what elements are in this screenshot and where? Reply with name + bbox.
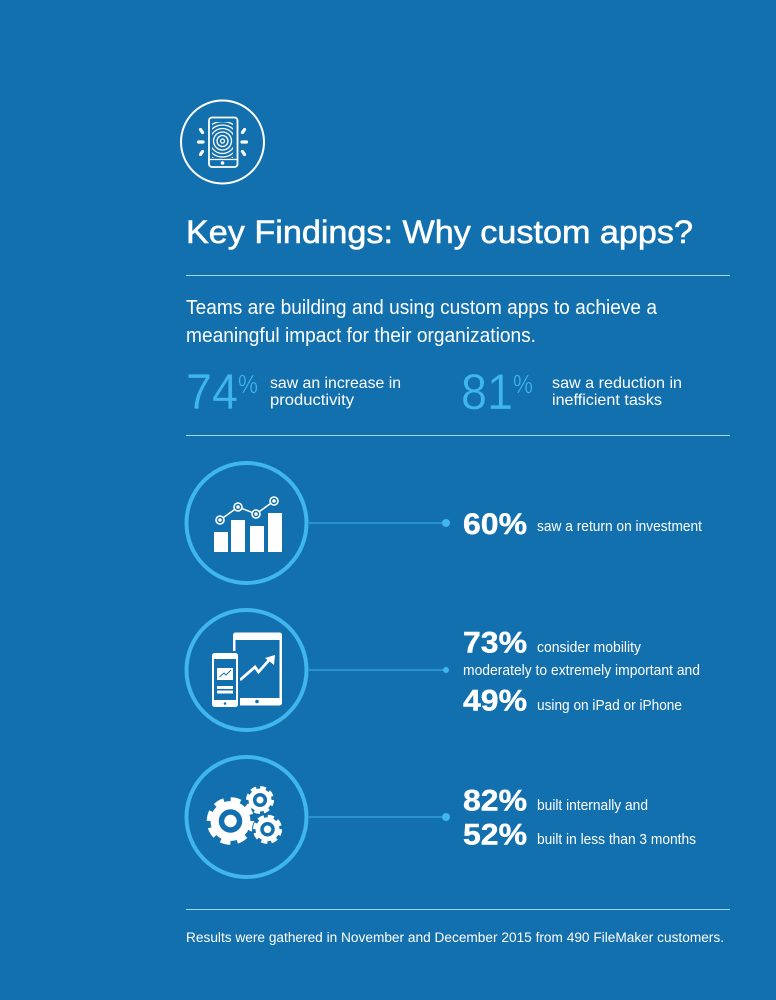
stat: 81% inefficient tasks: inefficient tasks	[552, 392, 662, 409]
stat: 73% and 49% mobility	[463, 626, 700, 718]
stat: 60% ROI: saw a return on investment	[537, 519, 702, 535]
intro text	[186, 297, 658, 347]
stat: 74% productivity: productivity	[270, 392, 354, 409]
stat: 81% inefficient tasks: saw a reduction in	[552, 375, 682, 392]
stat: 82% and 52% build: 52%	[463, 818, 527, 852]
stat: 74% productivity: 74	[186, 364, 238, 420]
stat: 73% and 49% mobility: 73%	[463, 626, 527, 660]
stat: 74% productivity: saw an increase in	[270, 375, 401, 392]
stat: 81% inefficient tasks: %	[513, 369, 533, 399]
footer note: Results were gathered in November and December 2015 from 490 FileMaker customers.	[186, 930, 724, 946]
stat: 73% and 49% mobility: using on iPad or iPhone	[537, 698, 682, 714]
stat: 82% and 52% build: built in less than 3 months	[537, 832, 696, 848]
stat: 60% ROI	[463, 508, 702, 541]
icon: phone with fingerprint	[181, 100, 264, 184]
connector: built internally	[309, 813, 450, 821]
intro text: Teams are building and using custom apps to achieve a	[186, 297, 658, 319]
stat: 73% and 49% mobility: moderately to extremely important and	[463, 663, 700, 679]
stat: 81% inefficient tasks: 81	[461, 364, 513, 420]
title: Key Findings: Why custom apps?	[186, 214, 693, 250]
stat: 73% and 49% mobility: 49%	[463, 684, 527, 718]
connector: return on investment	[309, 519, 450, 527]
stat: 82% and 52% build: 82%	[463, 784, 527, 818]
stat: 74% productivity: %	[238, 369, 258, 399]
stat: 82% and 52% build	[463, 784, 696, 852]
icon: tablet and phone in circle	[186, 610, 306, 730]
infographic page	[180, 100, 730, 945]
intro text: meaningful impact for their organizations.	[186, 325, 536, 347]
stat: 60% ROI: 60%	[463, 508, 527, 541]
stat: 73% and 49% mobility: consider mobility	[537, 640, 642, 656]
icon: bar chart in circle	[186, 463, 306, 583]
stat: 82% and 52% build: built internally and	[537, 798, 648, 814]
stat: 81% inefficient tasks	[461, 364, 682, 420]
connector: mobility	[309, 667, 449, 673]
icon: gears in circle	[186, 757, 306, 877]
stat: 74% productivity	[186, 364, 401, 420]
